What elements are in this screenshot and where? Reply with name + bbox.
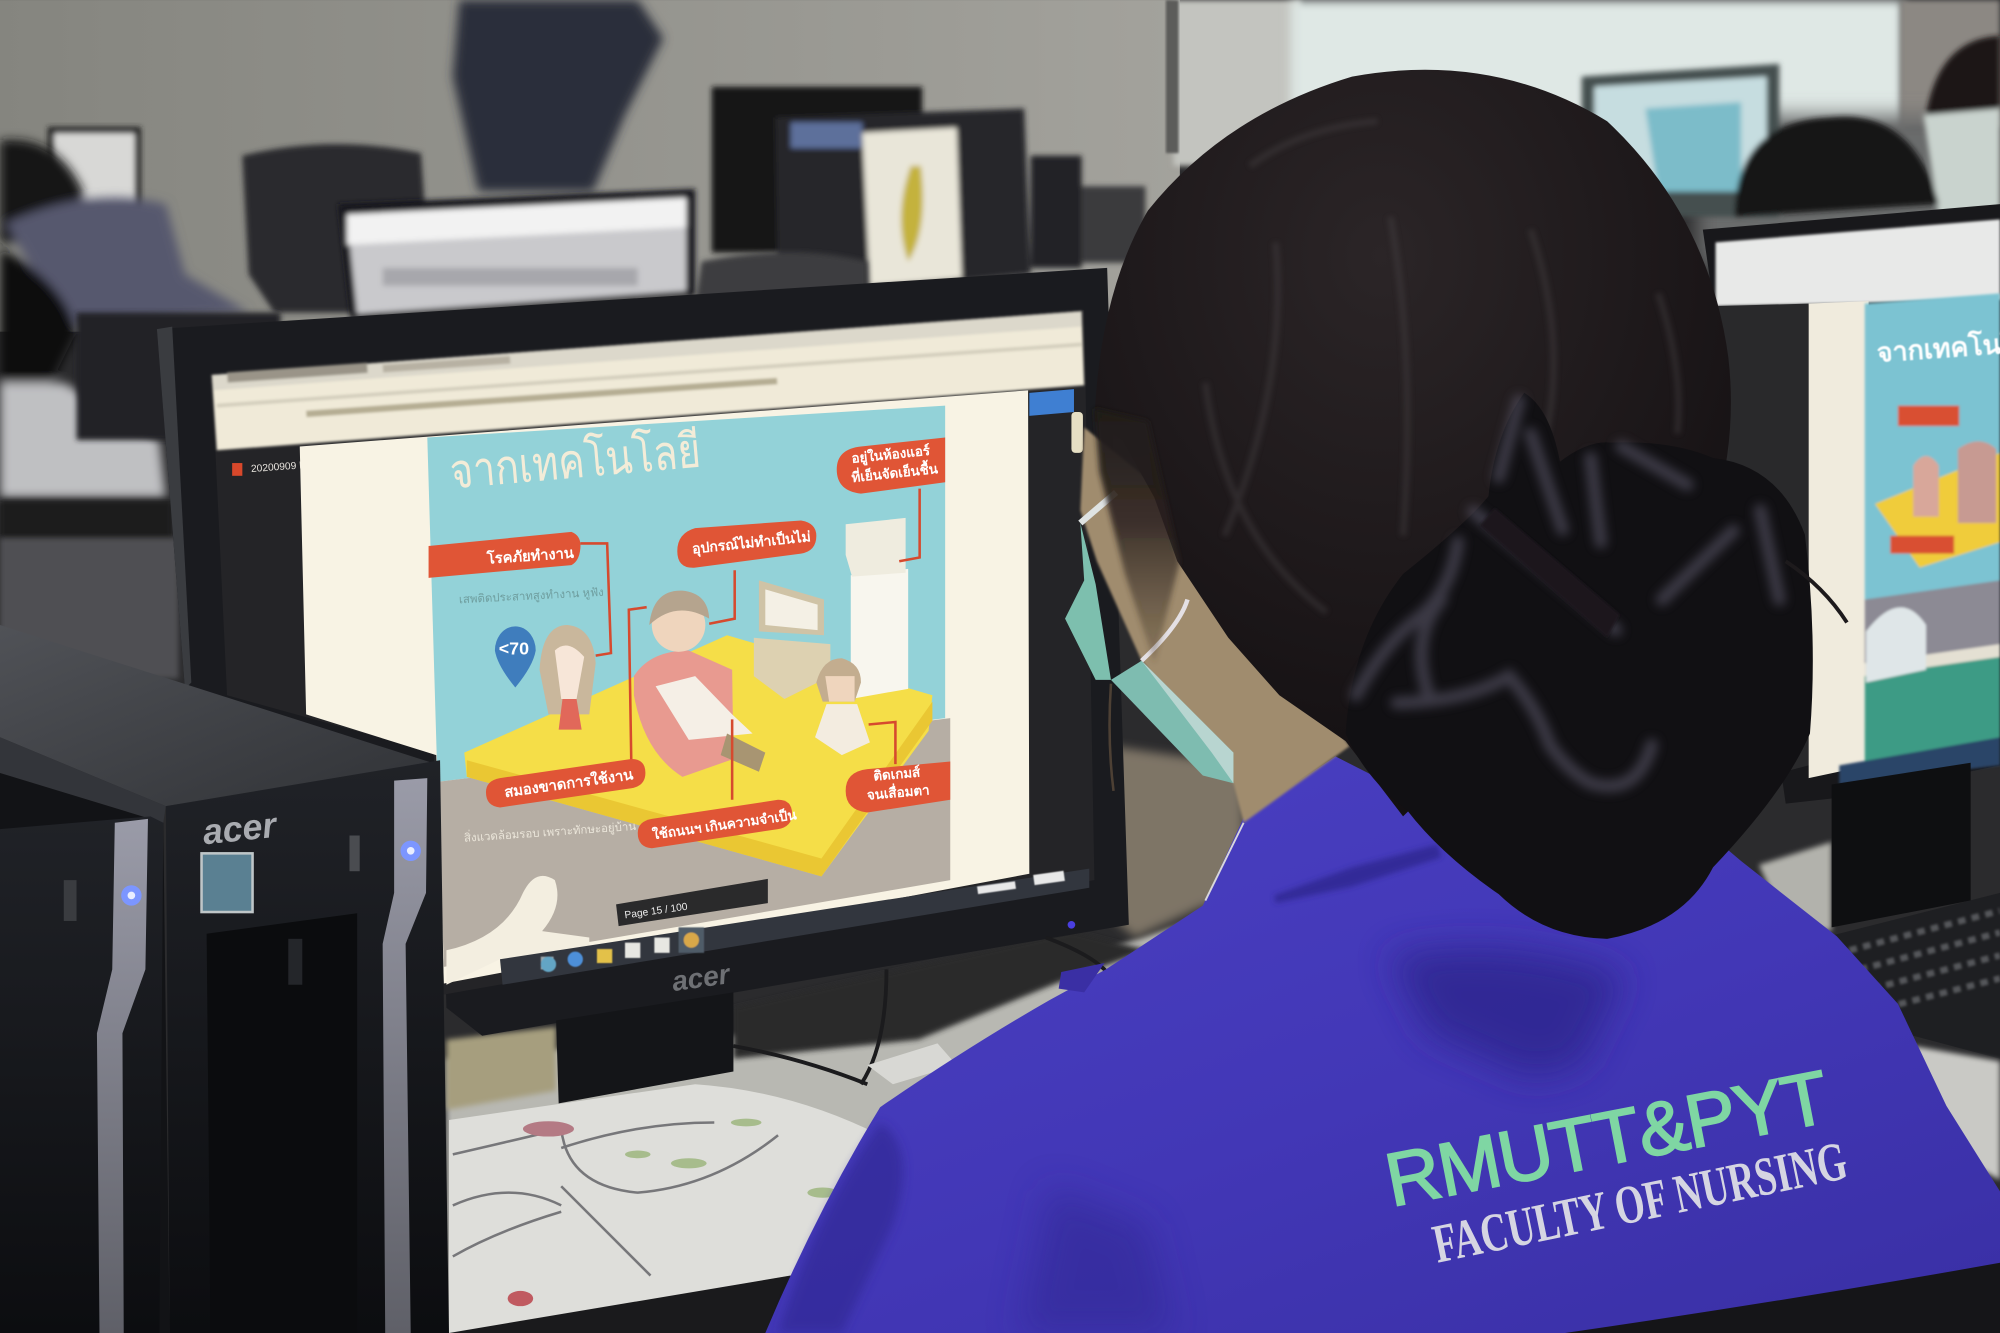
jacket: sleeve scrap (1059, 963, 1105, 992)
main monitor: pdf title: 20200909 Info Design.pdf (251, 456, 368, 475)
infographic: child (815, 658, 870, 755)
notebook: heart drawing (508, 1291, 533, 1306)
background: far left monitor (51, 130, 138, 209)
infographic: yellow platform (464, 635, 932, 876)
main monitor: share button (1029, 389, 1074, 416)
label: lower right (846, 762, 950, 813)
main monitor: scrollbar (1071, 412, 1083, 453)
main monitor: label text (485, 442, 939, 842)
main monitor: label text: ที่เย็นจัดเย็นชื้น (850, 458, 939, 485)
main monitor: label text: สมองขาดการใช้งาน (503, 765, 634, 801)
tower: front tower (166, 760, 449, 1333)
label: lower left (486, 759, 645, 807)
jacket: back shadow (1389, 947, 1625, 1078)
infographic: grey floor (438, 718, 950, 967)
background: right monitors (1582, 36, 2000, 217)
neck and face skin (1080, 427, 1349, 823)
main monitor: screen backing (212, 310, 1094, 995)
main monitor: pdf toolbar (616, 879, 768, 926)
background: chair (242, 144, 427, 313)
desk right side (1759, 763, 2000, 1180)
main monitor: browser chrome (212, 311, 1084, 450)
white desk object (867, 1043, 957, 1084)
background: rear monitor (338, 189, 695, 319)
jacket: lower shadow (1020, 1186, 1173, 1333)
main monitor: bezel (157, 268, 1129, 1036)
right monitor with infographic (1703, 204, 2000, 804)
hair: stray strand (1110, 684, 1114, 791)
main monitor: pdf page (300, 390, 1029, 983)
hair (1094, 70, 1731, 816)
cables and peripherals (733, 938, 1110, 1084)
background: person at left with cap (0, 140, 249, 497)
main monitor: taskbar icons (541, 871, 1065, 972)
woman (765, 70, 2000, 1333)
main monitor: stand (556, 992, 733, 1103)
infographic: heading: จากเทคโนโลยี (448, 423, 703, 500)
tower: drive bay (207, 913, 357, 1333)
tower: ports (64, 836, 360, 921)
main monitor: label text: ติดเกมส์ (873, 765, 922, 784)
desk front edge (449, 1276, 816, 1333)
left computer towers (0, 625, 449, 1333)
main monitor: label text: ใช้ถนนฯ เกินความจำเป็น (651, 805, 798, 842)
main monitor: label text: อยู่ในห้องแอร์ (851, 442, 932, 467)
label: lower centre (638, 800, 792, 848)
label: top centre (677, 520, 816, 568)
bun: satin highlights (1356, 401, 1779, 786)
main monitor: infographic (427, 406, 950, 985)
notebook: leaves (625, 1119, 838, 1198)
hair bun with scrunchie (1346, 393, 1847, 939)
label: top left (429, 532, 580, 578)
background: dark monitors with banana image (712, 87, 1145, 291)
main monitor: red pdf icon (232, 463, 242, 476)
tower: brand: acer (201, 805, 280, 852)
infographic: teal wall (427, 406, 945, 782)
main monitor: red callout lines (580, 489, 920, 800)
jacket: embroidered school name: RMUTT&PYT (1379, 1054, 1835, 1222)
notebook: flower drawing (523, 1121, 574, 1137)
hair: highlights (1205, 121, 1679, 612)
tower: intel sticker (202, 853, 253, 912)
dark shelf behind monitor (733, 931, 1148, 1059)
label: top right (837, 438, 945, 494)
main monitor: label text: จนเสื่อมตา (866, 779, 930, 803)
face mask (1065, 492, 1233, 783)
main monitor: label text: อุปกรณ์ไม่ทำเป็นไม่ (691, 527, 812, 558)
infographic: floor note: สิ่งแวดล้อมรอบ เพราะทักษะอยู่บ้าน (463, 818, 637, 845)
infographic: man in armchair (634, 591, 765, 777)
right monitor: dark margin (1716, 304, 1809, 778)
jacket: left fold shadow (778, 1122, 903, 1333)
right monitor: infographic page (1839, 293, 2000, 784)
main monitor: brand: acer (670, 958, 734, 997)
desk surface (446, 893, 1276, 1333)
main monitor: label text: โรคภัยทำงาน (485, 543, 574, 568)
infographic: air conditioner and column (846, 518, 908, 699)
blurred object beside mask (1112, 746, 1244, 938)
infographic: woman (540, 625, 596, 730)
jacket (765, 756, 2000, 1333)
main monitor: power light (1068, 921, 1075, 929)
notebook with tree drawing (449, 1084, 880, 1333)
tower: top surfaces (0, 625, 440, 806)
infographic: caption: เสพติดประสาทสูงทำงาน หูฟัง (459, 586, 604, 606)
tower: silver stripes (383, 778, 427, 1333)
foreground chair edge (1565, 1263, 2000, 1333)
hair: translucent side strands (1094, 408, 1180, 663)
main monitor: taskbar (500, 869, 1089, 985)
tower: power lights (121, 841, 421, 906)
keyboard keys (1849, 911, 2000, 1008)
main monitor (157, 268, 1129, 1103)
bun: ribbon band (1480, 508, 1620, 638)
jacket: collar fold (1274, 844, 1441, 903)
infographic: location pin (495, 626, 536, 688)
infographic: thumbs up hand (446, 876, 589, 985)
jacket: collar edge (1205, 823, 1244, 901)
infographic: television (754, 580, 830, 699)
right monitor: page margin (1809, 301, 1869, 778)
background: standing person (453, 0, 663, 191)
main monitor: red labels (429, 438, 950, 848)
tower: rear tower (0, 773, 170, 1333)
background: left desk (0, 313, 281, 679)
infographic: pin label: <70 (499, 638, 529, 658)
cream item under monitor (446, 1027, 556, 1110)
main monitor: toolbar text: Page 15 / 100 (624, 902, 689, 921)
